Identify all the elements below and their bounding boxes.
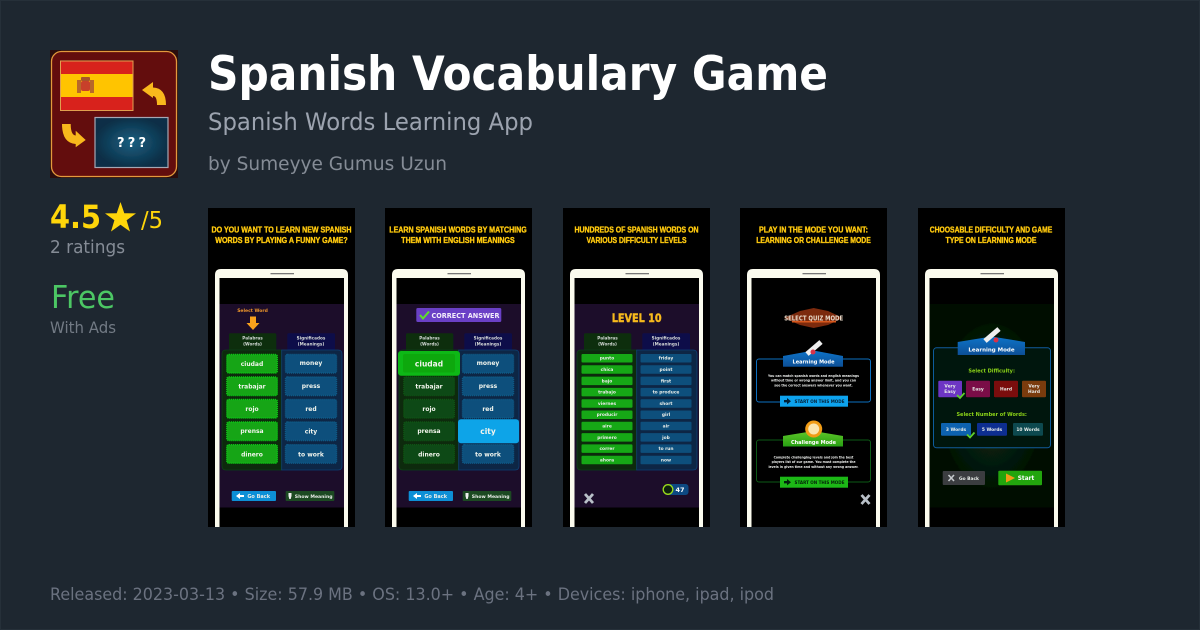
column headers: (Meanings) bbox=[298, 342, 324, 346]
column headers bbox=[406, 333, 512, 350]
column headers: (Meanings) bbox=[653, 342, 679, 346]
word panel: air bbox=[663, 424, 670, 430]
word panel with highlighted match: dinero bbox=[418, 451, 440, 458]
word panel: press bbox=[302, 383, 321, 390]
word panel: short bbox=[659, 401, 673, 407]
select word prompt: Select Word bbox=[237, 308, 268, 314]
learning mode card: You can match spanish words and english meanings bbox=[767, 374, 859, 378]
learning mode card: without time or wrong answer limit, and you can bbox=[771, 379, 856, 383]
settings panel: Select Number of Words: bbox=[956, 412, 1027, 418]
caption: CHOOSABLE DIFFICULTY AND GAME bbox=[930, 226, 1053, 234]
word panel bbox=[577, 350, 697, 470]
word panel: money bbox=[300, 360, 322, 367]
word panel with highlighted match bbox=[398, 350, 519, 470]
settings panel: Learning Mode bbox=[968, 348, 1015, 354]
screenshot 1: word list bbox=[208, 208, 355, 527]
challenge mode card: Challenge Mode bbox=[791, 440, 837, 446]
column headers: (Words) bbox=[598, 342, 617, 346]
word panel: correr bbox=[599, 446, 615, 452]
bottom buttons: Go Back bbox=[424, 494, 448, 500]
settings panel: Easy bbox=[944, 389, 956, 395]
bottom buttons bbox=[409, 491, 511, 501]
word panel: to work bbox=[298, 451, 325, 458]
settings panel: Select Difficulty: bbox=[968, 368, 1015, 374]
caption bbox=[574, 226, 699, 245]
bottom buttons: Show Meaning bbox=[472, 494, 510, 500]
word panel: to run bbox=[658, 446, 674, 452]
challenge mode card: levels in given time and without any wrong answer. bbox=[768, 465, 859, 469]
word panel: producir bbox=[597, 412, 618, 418]
column headers bbox=[229, 333, 335, 350]
settings panel: 3 Words bbox=[946, 427, 966, 433]
phone frame bbox=[747, 269, 880, 527]
learning mode card: START ON THIS MODE bbox=[794, 399, 844, 405]
caption: HUNDREDS OF SPANISH WORDS ON bbox=[574, 226, 699, 234]
challenge mode card: START ON THIS MODE bbox=[794, 480, 844, 486]
go back button bbox=[943, 471, 985, 485]
ads note: With Ads bbox=[50, 318, 116, 337]
settings panel: Hard bbox=[1000, 386, 1012, 392]
bottom buttons: Show Meaning bbox=[295, 494, 333, 500]
column headers: (Words) bbox=[243, 342, 262, 346]
icon: app icon with Spanish flag and mystery card bbox=[50, 50, 178, 178]
column headers: Significados bbox=[474, 336, 503, 340]
column headers: Significados bbox=[297, 336, 326, 340]
word panel: trabajar bbox=[238, 383, 266, 390]
title: Spanish Vocabulary Game bbox=[208, 47, 828, 102]
phone frame bbox=[570, 269, 703, 527]
word panel: punto bbox=[600, 356, 614, 362]
word panel: primero bbox=[597, 435, 617, 441]
rating: /5 bbox=[141, 208, 163, 234]
word panel: prensa bbox=[240, 428, 264, 435]
word panel with highlighted match: ciudad bbox=[415, 359, 443, 368]
footer metadata: Released: 2023-03-13 • Size: 57.9 MB • OS: 13.0+ • Age: 4+ • Devices: iphone, ipad, ipod bbox=[50, 585, 774, 605]
ratings count: 2 ratings bbox=[50, 237, 125, 258]
icon: close bbox=[585, 494, 593, 503]
word panel: trabajo bbox=[598, 390, 616, 396]
word panel: ahora bbox=[600, 457, 614, 463]
correct answer banner: CORRECT ANSWER bbox=[432, 312, 500, 320]
learning mode card bbox=[756, 342, 870, 407]
column headers: (Meanings) bbox=[475, 342, 501, 346]
icon: app icon with Spanish flag and mystery card: ??? bbox=[117, 136, 146, 151]
word panel with highlighted match: trabajar bbox=[415, 383, 443, 390]
phone frame bbox=[925, 269, 1058, 527]
word panel with highlighted match: red bbox=[482, 406, 494, 413]
icon: close bbox=[862, 495, 870, 504]
word panel: bajo bbox=[602, 378, 612, 384]
caption: DO YOU WANT TO LEARN NEW SPANISH bbox=[212, 226, 352, 234]
timer: 47 bbox=[675, 486, 685, 494]
screenshot 3: level 10 bbox=[563, 208, 710, 527]
word panel: aire bbox=[602, 424, 612, 430]
word panel with highlighted match: press bbox=[479, 383, 498, 390]
learning mode card: see the correct answers whenever you want. bbox=[774, 384, 853, 388]
word panel: point bbox=[660, 367, 672, 373]
rating bbox=[50, 198, 163, 236]
select quiz mode heading bbox=[784, 308, 843, 328]
word panel with highlighted match: prensa bbox=[417, 428, 441, 435]
settings panel: 10 Words bbox=[1016, 427, 1040, 433]
subtitle: Spanish Words Learning App bbox=[208, 108, 533, 136]
column headers bbox=[584, 333, 690, 350]
caption: VARIOUS DIFFICULTY LEVELS bbox=[586, 236, 687, 245]
caption: PLAY IN THE MODE YOU WANT: bbox=[759, 226, 868, 234]
word panel with highlighted match: to work bbox=[475, 451, 502, 458]
start button: Start bbox=[1018, 476, 1034, 482]
bottom buttons bbox=[232, 491, 334, 501]
caption bbox=[756, 226, 871, 245]
word panel bbox=[222, 350, 342, 470]
word panel: girl bbox=[662, 412, 671, 418]
word panel: red bbox=[305, 406, 317, 413]
settings panel: Easy bbox=[972, 386, 984, 392]
word panel: to produce bbox=[653, 390, 679, 396]
word panel: now bbox=[661, 458, 671, 463]
word panel: dinero bbox=[241, 451, 263, 458]
challenge mode card bbox=[756, 420, 870, 488]
word panel with highlighted match: money bbox=[477, 360, 499, 367]
challenge mode card: Complete challenging levels and join the best bbox=[774, 456, 854, 460]
caption: TYPE ON LEARNING MODE bbox=[946, 236, 1037, 245]
caption bbox=[212, 226, 352, 245]
timer bbox=[663, 484, 688, 495]
word panel: rojo bbox=[245, 406, 259, 413]
settings panel bbox=[934, 329, 1050, 448]
settings panel: Hard bbox=[1028, 389, 1040, 395]
column headers: Significados bbox=[652, 336, 681, 340]
screenshot 2: correct answer bbox=[385, 208, 532, 527]
caption bbox=[930, 226, 1053, 245]
word panel: chica bbox=[601, 367, 613, 373]
select quiz mode heading: SELECT QUIZ MODE bbox=[784, 314, 843, 322]
select word prompt bbox=[237, 308, 268, 330]
phone frame bbox=[215, 269, 348, 527]
word panel: viernes bbox=[598, 401, 616, 407]
settings panel: 5 Words bbox=[982, 427, 1002, 433]
column headers: (Words) bbox=[420, 342, 439, 346]
word panel: job bbox=[661, 435, 670, 441]
word panel with highlighted match: city bbox=[480, 427, 496, 436]
bottom buttons: Go Back bbox=[247, 494, 271, 500]
challenge mode card: players list of our game. You must complete the bbox=[772, 460, 855, 464]
price: Free bbox=[51, 280, 115, 316]
developer: by Sumeyye Gumus Uzun bbox=[208, 153, 447, 175]
word panel: ciudad bbox=[241, 361, 263, 368]
word panel: city bbox=[305, 428, 317, 436]
word panel: friday bbox=[659, 356, 673, 362]
phone frame bbox=[392, 269, 525, 527]
column headers: Palabras bbox=[419, 336, 440, 340]
correct answer banner bbox=[416, 308, 501, 322]
rating: 4.5 bbox=[50, 198, 101, 236]
screenshot 5: difficulty selection bbox=[918, 208, 1065, 527]
word panel with highlighted match: rojo bbox=[422, 406, 436, 413]
start button bbox=[998, 471, 1042, 485]
caption: LEARN SPANISH WORDS BY MATCHING bbox=[389, 226, 527, 234]
word panel: first bbox=[661, 378, 671, 384]
caption: LEARNING OR CHALLENGE MODE bbox=[756, 236, 871, 245]
column headers: Palabras bbox=[597, 336, 618, 340]
screenshot 4: quiz mode selection bbox=[740, 208, 887, 527]
go back button: Go Back bbox=[959, 476, 979, 482]
settings panel: Very bbox=[944, 384, 956, 390]
settings panel: Very bbox=[1028, 384, 1040, 390]
caption bbox=[389, 226, 527, 245]
column headers: Palabras bbox=[242, 336, 263, 340]
level heading: LEVEL 10 bbox=[612, 311, 662, 325]
caption: WORDS BY PLAYING A FUNNY GAME? bbox=[215, 236, 348, 245]
learning mode card: Learning Mode bbox=[793, 360, 835, 366]
caption: THEM WITH ENGLISH MEANINGS bbox=[401, 236, 515, 245]
